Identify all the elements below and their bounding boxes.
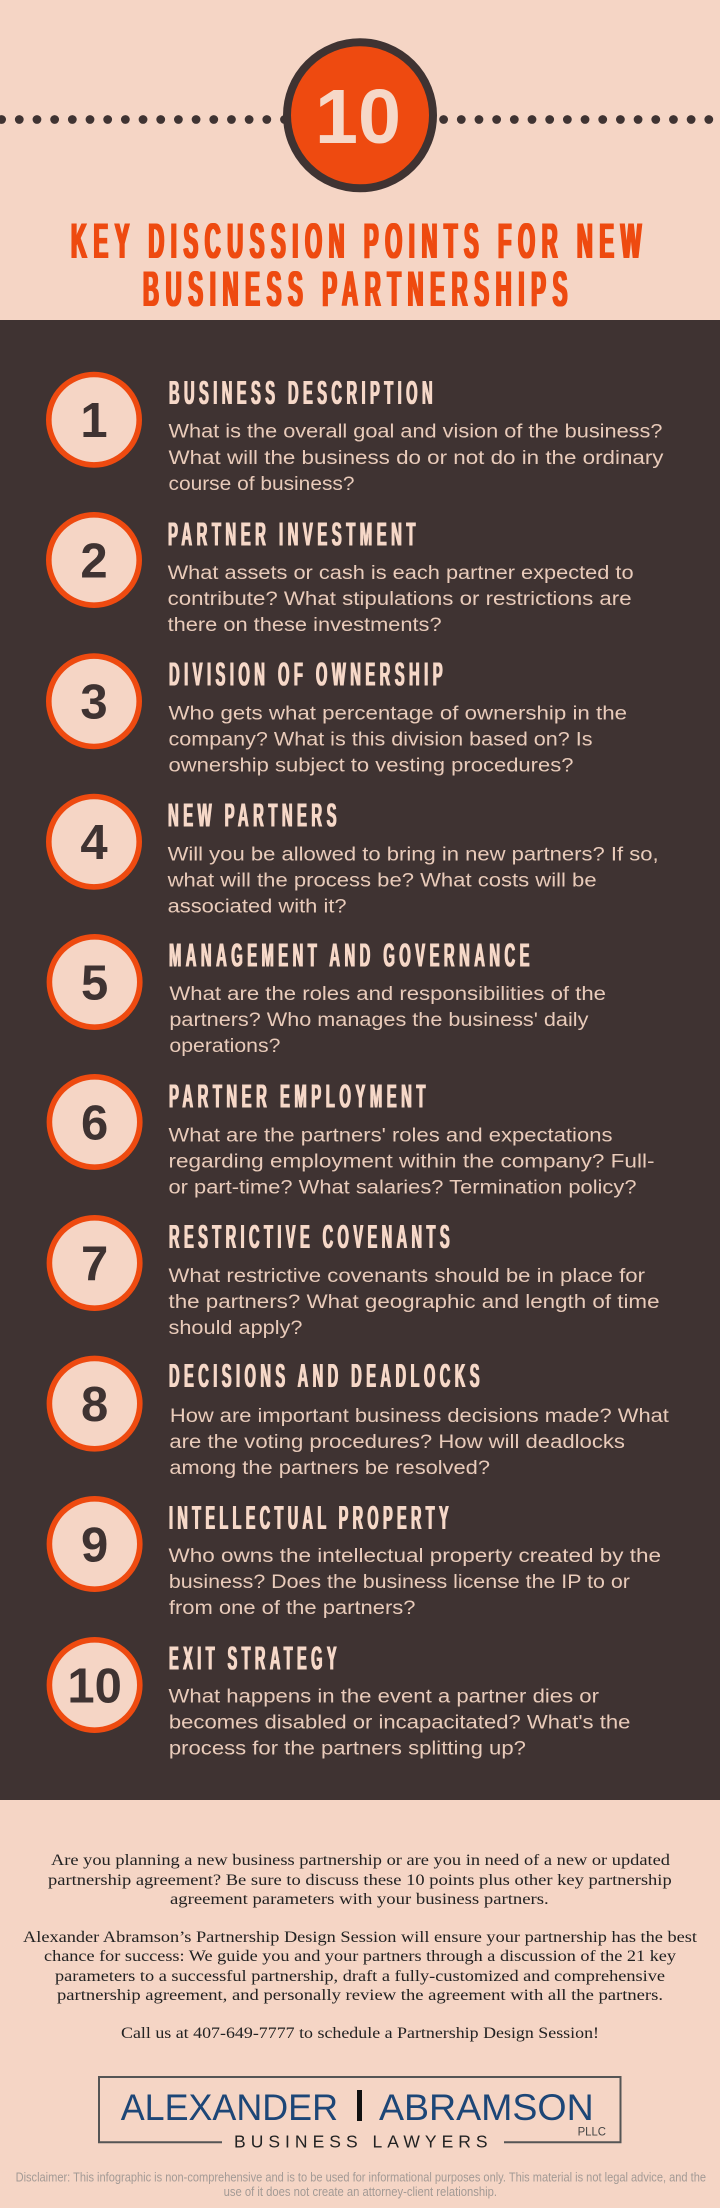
body 3: company? What is this division based on? Is [168,729,592,750]
item 2 [49,515,634,636]
item 9 [49,1499,661,1619]
number badge 10: 10 [67,1659,122,1713]
footer paragraph: intro [48,1852,672,1908]
item 5 [49,937,606,1057]
dotted line [2,115,712,124]
body 5: What are the roles and responsibilities of the [169,984,606,1005]
body 1: What is the overall goal and vision of the business? [168,422,662,443]
body 2: contribute? What stipulations or restrictions are [168,589,632,610]
body 5: partners? Who manages the business' daily [169,1010,589,1031]
body 8: among the partners be resolved? [169,1458,490,1479]
footer paragraph: intro: partnership agreement? Be sure to discuss these 10 points plus other key partnership [48,1872,672,1889]
body 4: Will you be allowed to bring in new partners? If so, [168,845,659,866]
footer paragraph: design session: parameters to a successful partnership, draft a fully-customized and comprehensive [55,1968,665,1985]
body 8 [169,1406,670,1479]
body 9: Who owns the intellectual property created by the [168,1546,661,1567]
item 8 [49,1357,670,1479]
badge: 10 [287,42,433,188]
number badge 9: 9 [81,1518,108,1572]
number badge 6 [49,1077,140,1167]
logo: Alexander Abramson: BUSINESS LAWYERS [234,2131,494,2151]
body 2 [168,563,634,636]
body 3: ownership subject to vesting procedures? [168,756,574,777]
item 1 [49,374,664,495]
item 6 [49,1077,654,1198]
number badge 5: 5 [81,956,108,1010]
number badge 1: 1 [80,394,108,448]
body 1: course of business? [168,474,354,495]
number badge 1 [49,374,139,465]
body 1 [168,422,664,495]
body 7 [168,1266,660,1339]
logo: Alexander Abramson: ABRAMSON [379,2086,594,2128]
body 7: the partners? What geographic and length of time [168,1292,660,1313]
body 10: What happens in the event a partner dies or [168,1686,600,1708]
footer paragraph: design session: partnership agreement, and personally review the agreement with all the partners. [57,1987,663,2004]
item 3 [49,656,627,777]
body 6: What are the partners' roles and expectations [168,1125,612,1146]
body 5 [169,984,606,1057]
call to action: Call us at 407-649-7777 to schedule a Partnership Design Session! [121,2025,599,2042]
disclaimer: use of it does not create an attorney-client relationship. [224,2184,497,2199]
body 4: what will the process be? What costs will be [166,871,597,892]
number badge 10 [49,1640,140,1730]
footer paragraph: design session [23,1929,698,2004]
body 4: associated with it? [168,897,347,918]
body 3: Who gets what percentage of ownership in the [168,703,627,724]
panel: discussion points [0,320,720,1800]
body 1: What will the business do or not do in the ordinary [168,448,664,469]
number badge 4: 4 [80,816,108,870]
footer paragraph: intro: agreement parameters with your business partners. [170,1891,549,1908]
body 9: business? Does the business license the IP to or [169,1572,631,1593]
body 7: should apply? [168,1318,302,1339]
title [71,213,648,317]
item 10 [49,1639,630,1760]
body 10 [168,1686,630,1760]
item 2: PARTNER INVESTMENT [168,515,420,552]
number badge 4 [49,796,139,887]
badge: 10: 10 [315,74,401,160]
number badge 3 [49,656,139,746]
body 5: operations? [169,1036,280,1057]
body 6: or part-time? What salaries? Termination policy? [168,1177,636,1198]
logo: Alexander Abramson: ALEXANDER [121,2086,338,2128]
body 6 [168,1125,654,1198]
number badge 6: 6 [81,1096,108,1150]
number badge 9 [49,1499,140,1589]
body 8: How are important business decisions made? What [170,1406,670,1427]
body 9 [168,1546,661,1619]
body 10: process for the partners splitting up? [169,1739,526,1760]
body 7: What restrictive covenants should be in place for [168,1266,646,1287]
body 2: What assets or cash is each partner expected to [168,563,634,584]
number badge 3: 3 [80,676,108,730]
footer paragraph: design session: chance for success: We guide you and your partners through a discussion of the 21 key [44,1948,676,1965]
footer paragraph: intro: Are you planning a new business partnership or are you in need of a new or updated [51,1852,670,1869]
body 10: becomes disabled or incapacitated? What's the [169,1713,630,1734]
item 10: EXIT STRATEGY [169,1639,341,1676]
number badge 5 [49,937,140,1027]
number badge 7 [49,1218,140,1308]
body 3 [168,703,627,777]
number badge 8 [49,1358,140,1449]
body 9: from one of the partners? [169,1598,416,1619]
footer paragraph: design session: Alexander Abramson’s Partnership Design Session will ensure your partnership has the best [23,1929,698,1946]
disclaimer [16,2169,706,2199]
body 8: are the voting procedures? How will deadlocks [169,1432,625,1453]
logo: Alexander Abramson: PLLC [578,2124,606,2138]
number badge 2 [49,515,139,605]
body 6: regarding employment within the company? Full- [168,1151,654,1172]
body 2: there on these investments? [168,615,442,636]
number badge 8: 8 [81,1378,108,1432]
item 4 [49,796,659,918]
number badge 2: 2 [80,534,108,588]
number badge 7: 7 [81,1237,108,1291]
logo: Alexander Abramson [99,2077,620,2151]
body 4 [166,845,659,918]
item 7 [49,1218,659,1339]
item 4: NEW PARTNERS [168,797,341,834]
